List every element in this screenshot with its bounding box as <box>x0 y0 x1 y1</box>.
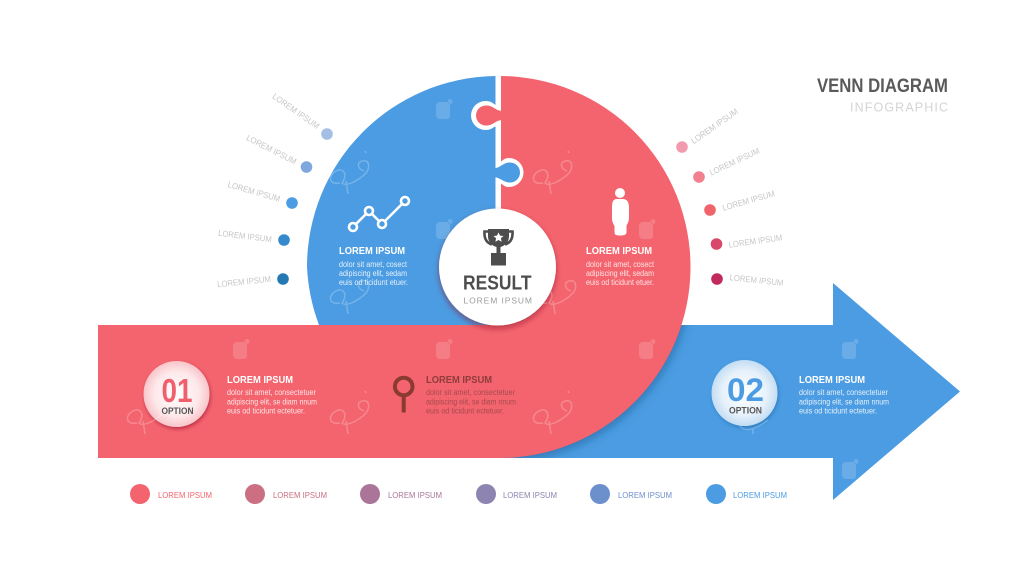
text block: red half <box>586 245 655 287</box>
text block: option 02 <box>799 374 889 416</box>
result circle: LOREM IPSUM <box>464 296 532 306</box>
title: VENN DIAGRAM <box>817 75 948 97</box>
right radial labels: LOREM IPSUM <box>708 146 761 177</box>
text block: option 02: LOREM IPSUM <box>799 374 865 386</box>
text block: blue half <box>339 245 408 287</box>
left radial labels: LOREM IPSUM <box>217 274 271 289</box>
result circle: RESULT <box>463 272 532 294</box>
text block: option 01: adipiscing elit, se diam nnum <box>227 398 317 406</box>
panel: blue half circle <box>307 76 496 325</box>
text block: red half: adipiscing elit, sedam <box>586 269 654 278</box>
text block: blue half: adipiscing elit, sedam <box>339 269 407 278</box>
text block: middle <box>426 374 516 416</box>
text block: option 02: euis od ticidunt ectetuer. <box>799 406 877 416</box>
badge: option 02: 02 <box>727 372 764 408</box>
text block: blue half: euis od ticidunt etuer. <box>339 278 408 287</box>
title <box>817 75 948 114</box>
icon: trophy <box>484 229 513 266</box>
badge: option 01: 01 <box>162 372 192 409</box>
badge: option 01: OPTION <box>162 406 194 417</box>
legend: LOREM IPSUM <box>158 490 212 500</box>
left radial dots <box>277 128 333 285</box>
left radial labels <box>217 91 321 289</box>
text block: middle: dolor sit amet, consectetuer <box>426 388 515 397</box>
icon: magnifier <box>395 378 413 412</box>
puzzle joint <box>471 76 524 211</box>
right radial labels: LOREM IPSUM <box>728 232 783 250</box>
text block: blue half: LOREM IPSUM <box>339 245 405 257</box>
result circle <box>439 208 556 326</box>
text block: middle: euis od ticidunt ectetuer. <box>426 406 504 416</box>
text block: option 01: euis od ticidunt ectetuer. <box>227 406 305 416</box>
left radial labels: LOREM IPSUM <box>245 133 298 166</box>
text block: option 01: dolor sit amet, consectetuer <box>227 388 316 397</box>
right radial labels: LOREM IPSUM <box>689 106 740 146</box>
icon: person <box>612 188 629 236</box>
arrow: option 02 <box>480 283 960 500</box>
legend: LOREM IPSUM <box>733 490 787 500</box>
text block: blue half: dolor sit amet, cosect <box>339 260 408 269</box>
text block: option 02: dolor sit amet, consectetuer <box>799 388 888 397</box>
text block: red half: euis od ticidunt etuer. <box>586 278 654 287</box>
legend <box>130 484 787 504</box>
legend: LOREM IPSUM <box>388 490 442 500</box>
panel: red half circle and band <box>98 76 691 458</box>
right radial labels: LOREM IPSUM <box>729 272 784 288</box>
icon: line chart <box>349 197 409 231</box>
legend: LOREM IPSUM <box>618 490 672 500</box>
text block: option 02: adipiscing elit, se diam nnum <box>799 398 889 406</box>
legend: LOREM IPSUM <box>273 490 327 500</box>
text block: option 01: LOREM IPSUM <box>227 374 293 386</box>
text block: middle: LOREM IPSUM <box>426 374 492 386</box>
text block: option 01 <box>227 374 317 416</box>
badge: option 02: OPTION <box>729 406 762 416</box>
left radial labels: LOREM IPSUM <box>227 179 281 204</box>
text block: red half: LOREM IPSUM <box>586 245 652 257</box>
text block: red half: dolor sit amet, cosect <box>586 260 655 269</box>
left radial labels: LOREM IPSUM <box>271 91 321 131</box>
badge: option 02 <box>712 360 778 426</box>
shadow of red circle on arrow <box>504 325 688 458</box>
legend: LOREM IPSUM <box>503 490 557 500</box>
right radial labels: LOREM IPSUM <box>721 188 776 213</box>
text block: middle: adipiscing elit, se diam nnum <box>426 398 516 406</box>
left radial labels: LOREM IPSUM <box>218 228 272 244</box>
right radial labels <box>689 106 784 288</box>
badge: option 01 <box>144 361 210 427</box>
title: INFOGRAPHIC <box>850 100 948 114</box>
right radial dots <box>676 141 723 285</box>
